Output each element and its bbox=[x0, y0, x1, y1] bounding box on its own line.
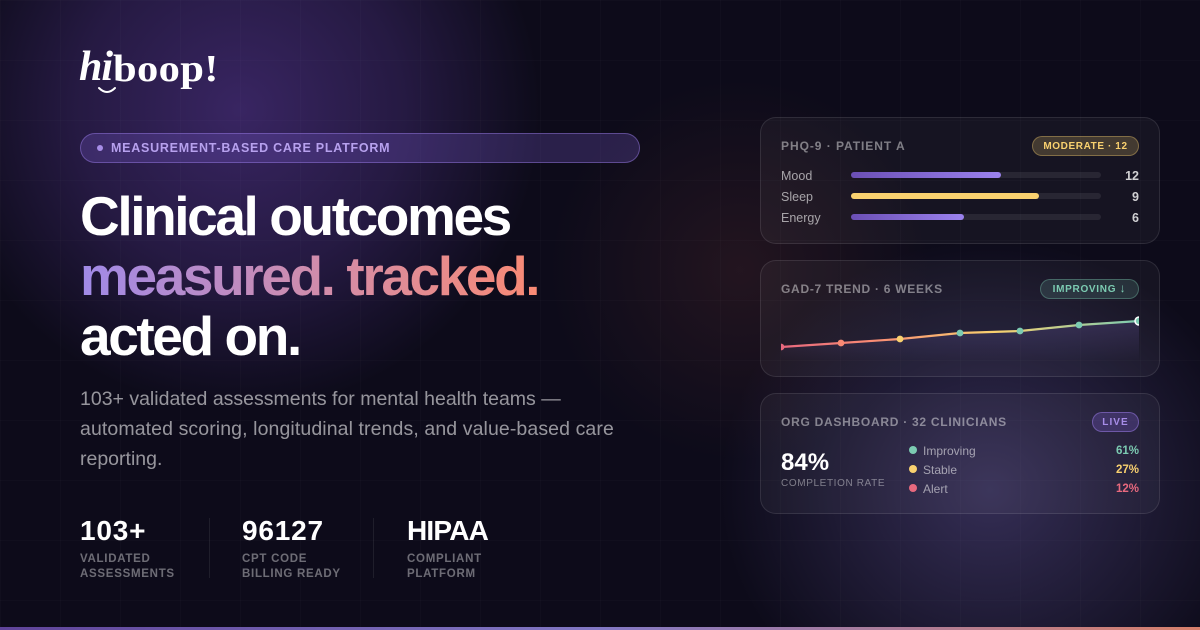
stat label: BILLING READY bbox=[242, 568, 341, 580]
subtitle: reporting. bbox=[80, 448, 162, 470]
metric value: 84% bbox=[781, 449, 829, 476]
row: sleep: Sleep bbox=[781, 190, 813, 204]
stat label bbox=[407, 553, 482, 580]
completion metric bbox=[781, 449, 885, 489]
bottom gradient bar bbox=[0, 627, 1200, 630]
logo script: hi bbox=[79, 44, 112, 90]
stat number: HIPAA bbox=[407, 515, 488, 546]
severity pill bbox=[1032, 136, 1139, 156]
stat label: PLATFORM bbox=[407, 568, 476, 580]
subtitle: automated scoring, longitudinal trends, and value-based care bbox=[80, 418, 614, 440]
badge bbox=[80, 133, 640, 163]
stat: assessments bbox=[80, 515, 175, 580]
stat label: CPT CODE bbox=[242, 553, 307, 565]
panel heading: ORG DASHBOARD · 32 CLINICIANS bbox=[781, 415, 1007, 429]
stat number: 103+ bbox=[80, 515, 146, 546]
logo bbox=[79, 44, 219, 93]
stat label bbox=[242, 553, 341, 580]
panel: PHQ-9: 9 bbox=[1132, 190, 1139, 204]
live pill: LIVE bbox=[1102, 417, 1129, 428]
row: improving bbox=[909, 446, 917, 454]
severity pill: MODERATE · 12 bbox=[1043, 141, 1128, 152]
panel: org dashboard: 61% bbox=[1116, 445, 1139, 457]
headline: acted on. bbox=[80, 305, 300, 367]
panel heading: PHQ-9 · PATIENT A bbox=[781, 139, 906, 153]
logo smile bbox=[98, 87, 116, 93]
headline: Clinical outcomes bbox=[80, 185, 510, 247]
panel: org dashboard bbox=[760, 393, 1160, 514]
stat label bbox=[80, 553, 175, 580]
panel: org dashboard: 27% bbox=[1116, 464, 1139, 476]
headline gradient line: measured. tracked. bbox=[80, 245, 538, 307]
stat number: 96127 bbox=[242, 515, 324, 546]
panel: org dashboard: 12% bbox=[1116, 483, 1139, 495]
panel: org dashboard: Alert bbox=[923, 482, 948, 496]
logo wordmark: boop! bbox=[113, 48, 219, 90]
panel: org dashboard: Stable bbox=[923, 463, 957, 477]
status pill bbox=[1040, 279, 1139, 299]
panel heading: GAD-7 TREND · 6 WEEKS bbox=[781, 282, 943, 296]
stat: CPT code bbox=[242, 515, 341, 580]
status pill: IMPROVING ↓ bbox=[1053, 281, 1126, 295]
row: alert bbox=[909, 484, 917, 492]
panel: PHQ-9: 12 bbox=[1125, 169, 1139, 183]
stat label: VALIDATED bbox=[80, 553, 151, 565]
panel: org dashboard: Improving bbox=[923, 444, 976, 458]
subtitle bbox=[80, 388, 614, 470]
row: stable bbox=[909, 465, 917, 473]
row: mood: Mood bbox=[781, 169, 812, 183]
stat: HIPAA bbox=[407, 515, 488, 580]
stat label: COMPLIANT bbox=[407, 553, 482, 565]
row: energy: Energy bbox=[781, 211, 821, 225]
line chart bbox=[781, 316, 1139, 352]
stat label: ASSESSMENTS bbox=[80, 568, 175, 580]
badge dot bbox=[97, 145, 103, 151]
subtitle: 103+ validated assessments for mental health teams — bbox=[80, 388, 561, 410]
panel: PHQ-9: 6 bbox=[1132, 211, 1139, 225]
live pill bbox=[1092, 412, 1139, 432]
headline bbox=[80, 185, 538, 367]
panel: GAD-7 bbox=[760, 260, 1160, 377]
panel: PHQ-9 bbox=[760, 117, 1160, 244]
badge text: MEASUREMENT-BASED CARE PLATFORM bbox=[111, 141, 390, 155]
metric label: COMPLETION RATE bbox=[781, 478, 885, 489]
